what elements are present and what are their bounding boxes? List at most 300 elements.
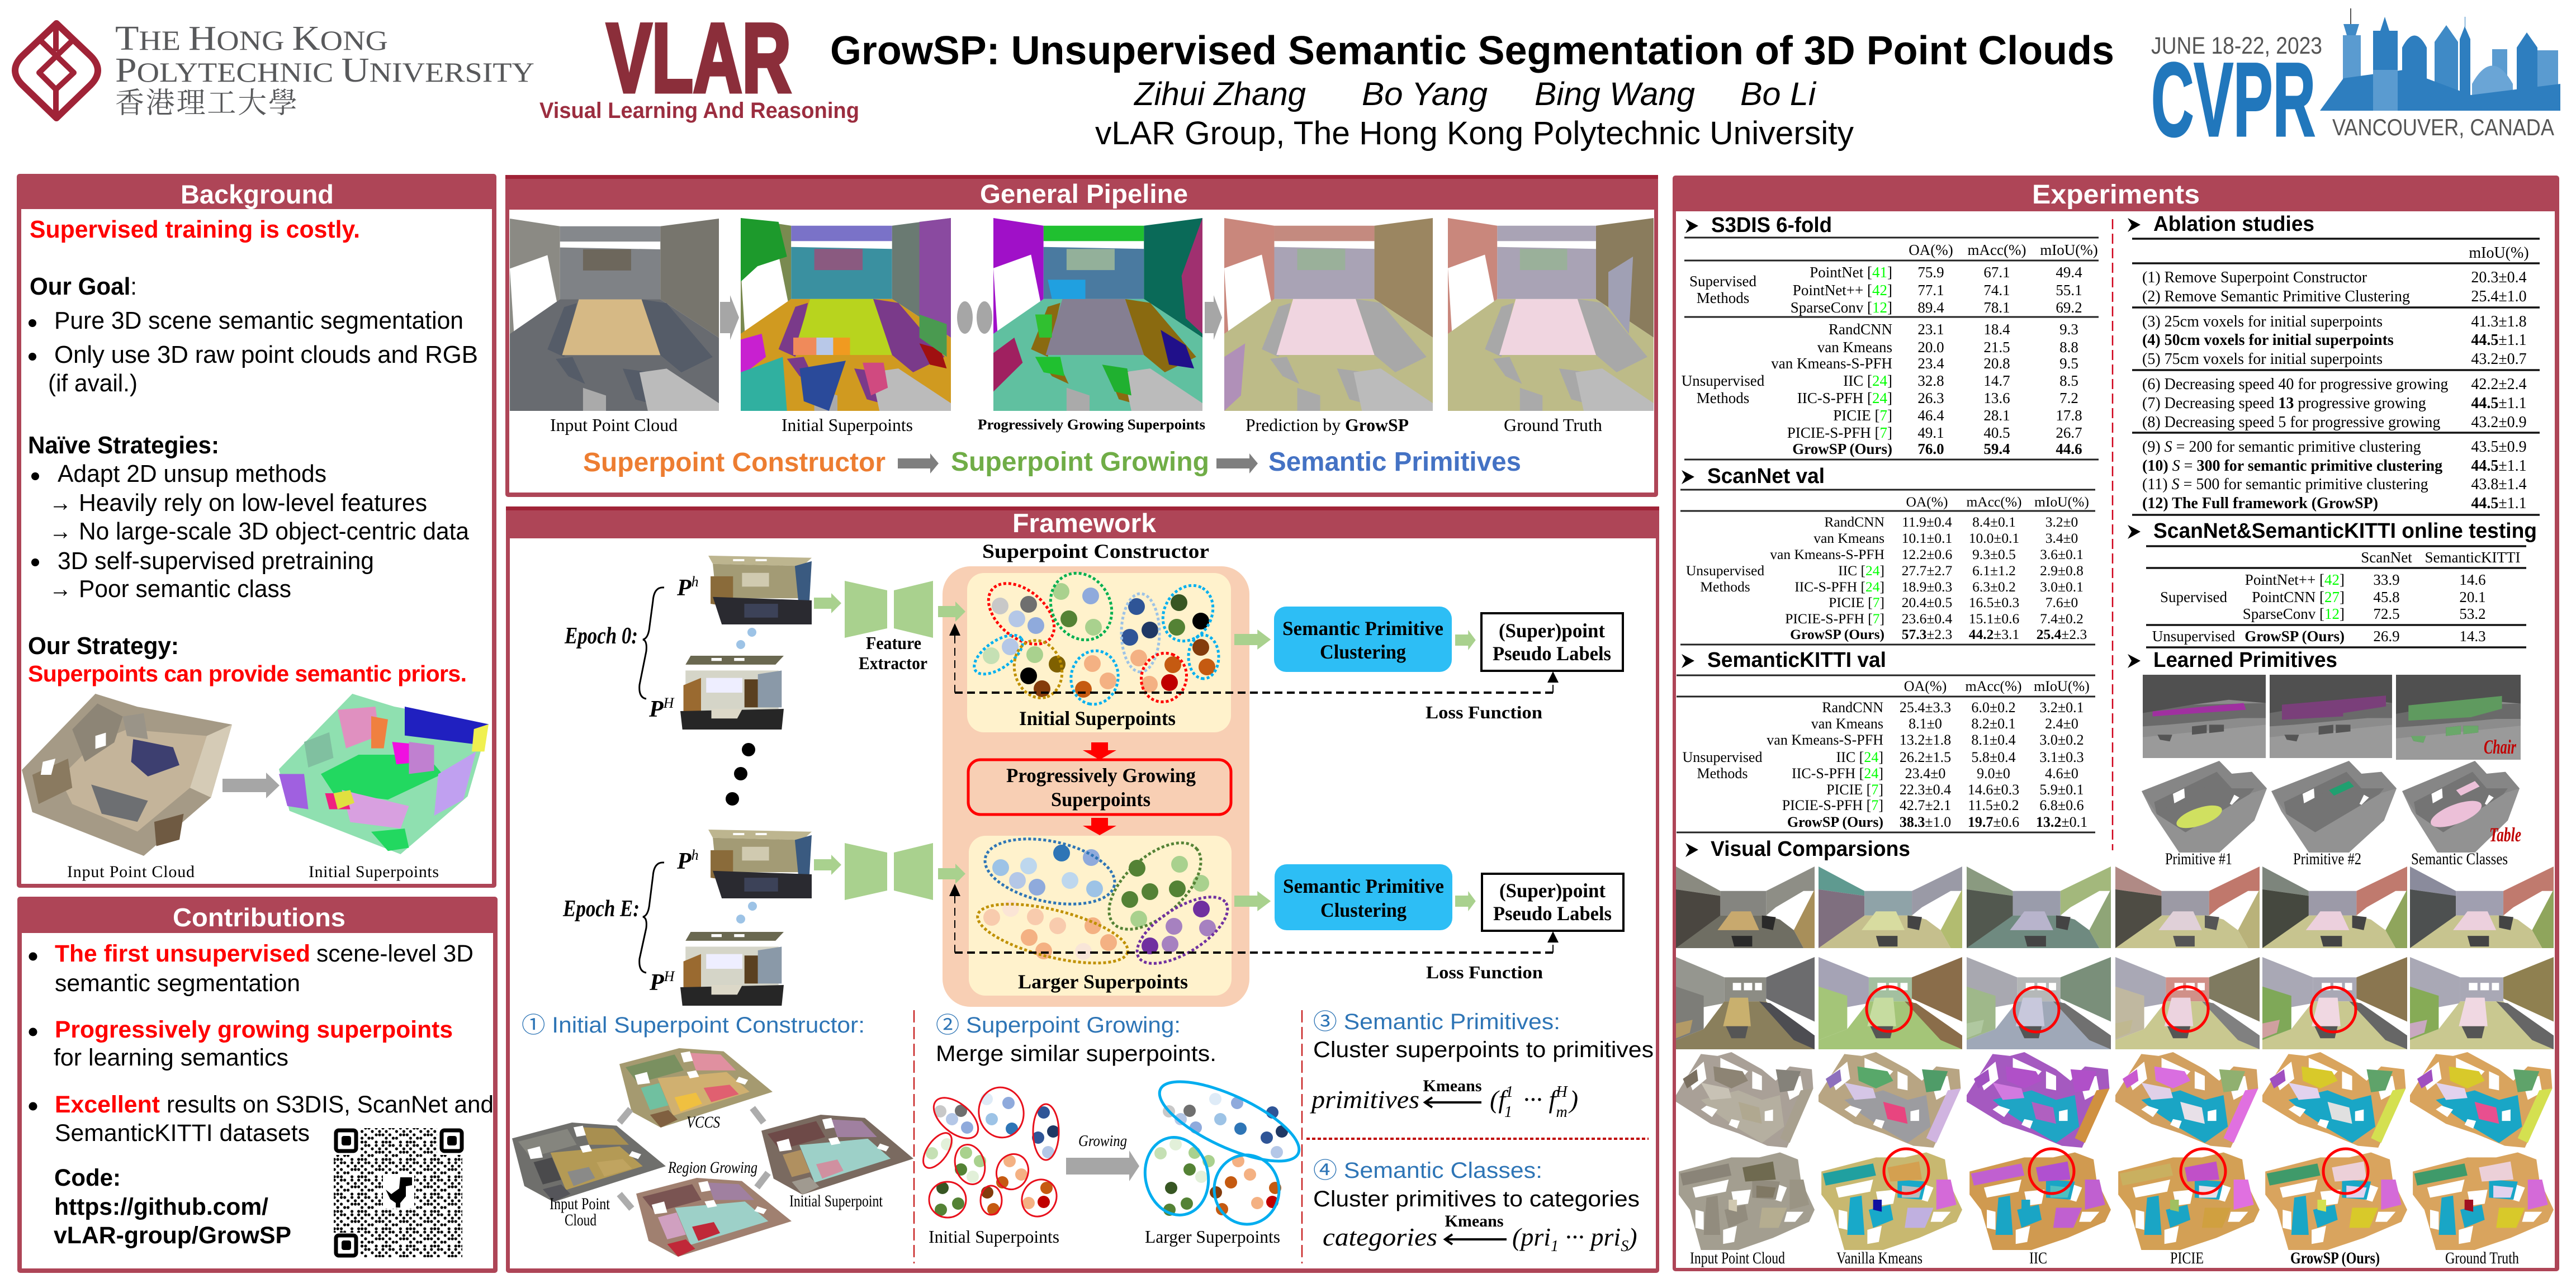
table: ScanNet results: 10.1±0.1 <box>1902 530 1952 546</box>
section: learned primitives <box>2128 648 2521 868</box>
heading: experiments: Experiments <box>2032 180 2200 210</box>
table: ScanNet results: 11.9±0.4 <box>1902 514 1952 530</box>
text: cluster primitives: Cluster primitives to categories <box>1313 1187 1640 1211</box>
heading: visual comparisons: Visual Comparsions <box>1711 837 1910 861</box>
block: pseudo labels 0: Pseudo Labels <box>1493 642 1611 665</box>
image: chair semantic class <box>2396 675 2521 760</box>
formula: categories: ) <box>1627 1223 1637 1251</box>
captions: visual comparisons: Vanilla Kmeans <box>1836 1249 1922 1267</box>
text block: background copy: Naïve Strategies: <box>28 432 219 459</box>
captions: visual comparisons: IIC <box>2029 1249 2047 1267</box>
text block: background copy: Superpoints can provide semantic priors. <box>28 661 467 686</box>
table: ablation results: 25.4±1.0 <box>2471 288 2527 305</box>
captions: growing figure: Initial Superpoints <box>929 1227 1059 1247</box>
text: merge similar: Merge similar superpoints. <box>936 1041 1216 1066</box>
header: vLAR logo <box>539 4 859 123</box>
table: SemanticKITTI results: 26.2±1.5 <box>1900 749 1951 765</box>
table: SemanticKITTI results: PICIE-S-PFH [7] <box>1782 797 1883 813</box>
table: ablation results: (8) Decreasing speed 5 for progressive growing <box>2142 414 2440 431</box>
image: chair primitive 2 <box>2270 675 2392 758</box>
feature extractor: epoch E <box>845 843 933 900</box>
formula: categories: 1 <box>1551 1238 1559 1255</box>
table: SemanticKITTI results: 3.1±0.3 <box>2039 749 2084 765</box>
table: S3DIS results: IIC-S-PFH [24] <box>1797 390 1892 406</box>
header: CVPR logo <box>2151 8 2560 158</box>
caption: input point cloud: Input Point Cloud <box>67 863 195 881</box>
captions: learned primitives <box>2165 850 2508 868</box>
text: cluster superpoints: Cluster superpoints to primitives <box>1313 1038 1654 1062</box>
labels: VCCS and region growing: Cloud <box>565 1211 596 1229</box>
table: ScanNet results: 18.9±0.3 <box>1902 579 1952 595</box>
table: ScanNet results: 6.3±0.2 <box>1972 579 2016 595</box>
table: S3DIS results: 55.1 <box>2056 282 2082 299</box>
table: ablation results: (5) 75cm voxels for initial superpoints <box>2142 351 2383 368</box>
label: initial superpoints: Initial Superpoints <box>1019 707 1176 730</box>
groupings: larger dotted ellipses <box>972 827 1238 977</box>
panel: contributions <box>17 897 498 1273</box>
section: ablation studies <box>2128 212 2540 515</box>
heading: contributions: Contributions <box>173 903 345 932</box>
table: ScanNet results: 23.6±0.4 <box>1902 610 1952 627</box>
table: online testing results: 20.1 <box>2459 589 2486 605</box>
table: ScanNet results: mIoU(%) <box>2034 494 2089 510</box>
block: semantic primitive clustering E <box>1275 864 1452 930</box>
formula: categories <box>1323 1212 1637 1255</box>
header: vLAR logo: VLAR <box>607 4 791 113</box>
university name english: THE HONG KONG <box>115 20 388 58</box>
table: SemanticKITTI results: 5.9±0.1 <box>2039 782 2084 798</box>
table: ScanNet results: 20.4±0.5 <box>1902 594 1952 610</box>
table: S3DIS results: 69.2 <box>2056 299 2082 316</box>
labels: epoch 0: P <box>677 575 692 601</box>
code link: vLAR-group/GrowSP <box>54 1222 291 1249</box>
table: SemanticKITTI results: 23.4±0 <box>1905 765 1945 782</box>
image: input house <box>512 1123 666 1202</box>
heading: ablation: Ablation studies <box>2153 212 2314 236</box>
table: SemanticKITTI results: 19.7±0.6 <box>1968 814 2019 830</box>
heading: step 1: ① Initial Superpoint Constructor: <box>522 1013 865 1038</box>
arrow: growing to primitives <box>1216 453 1258 473</box>
formula: primitives: Kmeans <box>1423 1077 1481 1095</box>
labels: epoch E <box>562 847 699 996</box>
table: S3DIS results: RandCNN <box>1829 321 1892 338</box>
heading: learned primitives: Learned Primitives <box>2153 648 2337 672</box>
table: S3DIS results: 23.4 <box>1917 355 1944 372</box>
table: ScanNet results: 3.2±0 <box>2045 514 2078 530</box>
authors <box>1133 76 1817 112</box>
table: ablation results: 43.2±0.7 <box>2471 351 2527 368</box>
text block: background copy: (if avail.) <box>48 370 138 397</box>
table: S3DIS results: 59.4 <box>1983 441 2010 457</box>
heading: background: Background <box>181 179 334 209</box>
labels: VCCS and region growing <box>550 1113 883 1229</box>
image: initial superpoints <box>279 694 489 854</box>
dots: initial superpoints small <box>926 1093 1059 1216</box>
table: online testing results: 14.6 <box>2459 571 2486 588</box>
image: region growing house <box>636 1178 792 1257</box>
table: S3DIS results: 40.5 <box>1983 424 2010 441</box>
heading: general pipeline: General Pipeline <box>980 179 1188 209</box>
text block: background copy: Only use 3D raw point clouds and RGB <box>54 341 478 368</box>
image: top house VCCS <box>619 1048 773 1128</box>
table: S3DIS results: 7.2 <box>2059 390 2078 406</box>
table: ScanNet results: 15.1±0.6 <box>1969 610 2019 627</box>
panel: background <box>17 174 496 888</box>
authors: Zihui Zhang <box>1133 76 1306 112</box>
label: table: Table <box>2489 823 2521 846</box>
table: S3DIS results: 18.4 <box>1983 321 2010 338</box>
loss loop E <box>949 884 1559 982</box>
table: SemanticKITTI results: 8.2±0.1 <box>1971 716 2016 732</box>
table: S3DIS results: mAcc(%) <box>1968 242 2026 258</box>
table: SemanticKITTI results: 3.0±0.2 <box>2039 732 2084 748</box>
table: SemanticKITTI results: 38.3±1.0 <box>1900 814 1951 830</box>
text block: background copy: → <box>49 489 72 517</box>
table: ablation results: 43.5±0.9 <box>2471 438 2527 456</box>
table: SemanticKITTI results: 13.2±1.8 <box>1900 732 1951 748</box>
table: ScanNet results: 27.7±2.7 <box>1902 562 1952 579</box>
formula: categories: Kmeans <box>1445 1212 1504 1230</box>
input rooms: epoch 0 <box>680 556 812 730</box>
table: ablation results: 44.5±1.1 <box>2471 495 2527 512</box>
heading: step 4: ④ Semantic Classes: <box>1313 1158 1542 1183</box>
formula: categories: categories <box>1323 1223 1437 1251</box>
table: online testing results: PointNet++ [42] <box>2245 571 2345 588</box>
table: S3DIS results: van Kmeans-S-PFH <box>1771 355 1892 372</box>
label: semantic primitives: Semantic Primitives <box>1268 447 1521 477</box>
authors: Bo Yang <box>1362 76 1488 112</box>
table: online testing results: 72.5 <box>2373 605 2400 622</box>
block: semantic primitive clustering 0: Semantic Primitive <box>1282 617 1443 640</box>
table: S3DIS results: 77.1 <box>1917 282 1944 299</box>
table: ablation results: (6) Decreasing speed 40 for progressive growing <box>2142 376 2448 393</box>
caption: initial superpoints: Initial Superpoints <box>309 863 439 881</box>
table: SemanticKITTI results: 8.1±0.4 <box>1971 732 2016 748</box>
captions: learned primitives: Semantic Classes <box>2411 850 2508 868</box>
table: SemanticKITTI results: OA(%) <box>1904 678 1947 694</box>
formula: primitives: 1 <box>1505 1083 1512 1101</box>
table: S3DIS results: 49.1 <box>1917 424 1944 441</box>
captions: visual comparisons: Ground Truth <box>2445 1249 2519 1267</box>
header: vLAR logo: Visual Learning And Reasoning <box>539 98 859 123</box>
table: S3DIS results: mIoU(%) <box>2040 242 2098 258</box>
contribution 1: semantic segmentation <box>55 970 300 997</box>
labels: epoch 0 <box>564 574 699 722</box>
table: SemanticKITTI results: 8.1±0 <box>1909 716 1942 732</box>
table: ablation results: (2) Remove Semantic Primitive Clustering <box>2142 288 2410 305</box>
labels: epoch 0: h <box>692 574 699 590</box>
groupings: larger cyan ellipses <box>1138 1066 1309 1227</box>
block: semantic primitive clustering E: Semantic Primitive <box>1283 875 1444 897</box>
table: S3DIS results: Unsupervised <box>1682 372 1765 389</box>
contribution 3: Excellent <box>55 1091 160 1118</box>
image: table primitive 2 <box>2271 761 2397 853</box>
heading: S3DIS: S3DIS 6-fold <box>1711 214 1832 237</box>
arrow: pipeline step 1 <box>720 295 739 340</box>
box: progressively growing superpoints <box>968 760 1231 815</box>
arrow: growing <box>1066 1150 1139 1181</box>
labels: VCCS and region growing: Input Point <box>550 1195 610 1213</box>
table: SemanticKITTI results: mIoU(%) <box>2034 678 2090 694</box>
authors: Bing Wang <box>1535 76 1695 112</box>
formula: primitives: ) <box>1568 1085 1578 1114</box>
formula: categories: (pri <box>1512 1223 1551 1251</box>
heading: superpoint constructor: Superpoint Constructor <box>982 540 1209 562</box>
dots: larger superpoints <box>983 845 1216 960</box>
label: larger superpoints: Larger Superpoints <box>1018 970 1188 993</box>
heading: step 3: ③ Semantic Primitives: <box>1313 1010 1560 1034</box>
table: S3DIS results: PointNet [41] <box>1810 264 1892 281</box>
image row 3: house scenes <box>1676 1052 2552 1148</box>
table: ScanNet results: 57.3±2.3 <box>1902 626 1952 642</box>
table: S3DIS results: 21.5 <box>1983 339 2010 356</box>
code link: Code: <box>54 1164 121 1191</box>
university name english <box>115 20 534 89</box>
formula: categories: ··· <box>1559 1223 1591 1251</box>
ellipsis: between epochs <box>726 743 755 806</box>
header: university logo <box>15 20 534 120</box>
table: SemanticKITTI results: GrowSP (Ours) <box>1787 814 1883 830</box>
contribution 1 <box>29 940 473 997</box>
table: ablation results: 42.2±2.4 <box>2471 376 2527 393</box>
table: online testing results: Unsupervised <box>2152 628 2236 645</box>
image row 1: library rooms <box>1676 866 2554 948</box>
section: S3DIS 6-fold <box>1682 214 2099 460</box>
image row 4: apartment scenes <box>1679 1152 2554 1250</box>
captions: learned primitives: Primitive #2 <box>2293 850 2361 868</box>
image: table semantic class <box>2402 761 2520 853</box>
table: ablation results: (9) S = 200 for semantic primitive clustering <box>2142 438 2421 456</box>
table: online testing results: 14.3 <box>2459 628 2486 645</box>
text block: background copy: Our Goal: <box>30 273 137 300</box>
contribution 3: SemanticKITTI datasets <box>55 1120 310 1147</box>
authors: Bo Li <box>1740 76 1817 112</box>
table: SemanticKITTI results: 13.2±0.1 <box>2036 814 2087 830</box>
formula: primitives: (f <box>1490 1085 1505 1114</box>
table: S3DIS results: PICIE [7] <box>1833 407 1892 424</box>
text block: background copy: Heavily rely on low-level features <box>79 489 427 517</box>
table: ScanNet results: van Kmeans-S-PFH <box>1770 546 1884 562</box>
table: ScanNet results: van Kmeans <box>1813 530 1884 546</box>
block: pseudo labels 0 <box>1481 613 1623 671</box>
table: S3DIS results: OA(%) <box>1909 242 1953 258</box>
table: ablation results: mIoU(%) <box>2469 244 2529 262</box>
captions: visual comparisons: GrowSP (Ours) <box>2290 1249 2380 1267</box>
block: semantic primitive clustering 0: Clustering <box>1320 641 1406 663</box>
text block: background copy: No large-scale 3D object-centric data <box>79 518 469 545</box>
table: S3DIS results: 67.1 <box>1983 264 2010 281</box>
image row 2: office rooms <box>1676 957 2554 1049</box>
table: S3DIS results: 20.0 <box>1917 339 1944 356</box>
image: input point cloud <box>510 219 719 411</box>
formula: primitives: m <box>1556 1104 1568 1121</box>
captions: Progressively Growing Superpoints <box>978 416 1205 433</box>
image: prediction by GrowSP <box>1224 218 1433 411</box>
table: S3DIS results: IIC [24] <box>1843 372 1892 389</box>
table: S3DIS results: 13.6 <box>1983 390 2010 406</box>
table: SemanticKITTI results: 6.0±0.2 <box>1971 699 2016 716</box>
table: ScanNet results: 12.2±0.6 <box>1902 546 1952 562</box>
labels: epoch E: h <box>692 847 699 863</box>
label: chair: Chair <box>2484 736 2517 758</box>
image: initial superpoint house <box>761 1115 913 1195</box>
table: S3DIS results: 76.0 <box>1917 441 1944 457</box>
column: initial superpoint constructor <box>512 1013 913 1257</box>
table: SemanticKITTI results: 14.6±0.3 <box>1968 782 2019 798</box>
labels: epoch 0: H <box>663 695 675 711</box>
table: S3DIS results: GrowSP (Ours) <box>1792 441 1892 457</box>
title: GrowSP: Unsupervised Semantic Segmentation of 3D Point Clouds <box>830 29 2114 73</box>
section: online testing <box>2128 519 2537 647</box>
table: ablation results: 44.5±1.1 <box>2471 457 2527 475</box>
table: online testing results: GrowSP (Ours) <box>2244 628 2345 645</box>
table: ablation results <box>2132 239 2540 515</box>
table: S3DIS results: van Kmeans <box>1817 339 1892 356</box>
table: S3DIS results: Supervised <box>1689 273 1756 290</box>
table: ScanNet results: GrowSP (Ours) <box>1790 626 1884 642</box>
formula: primitives: H <box>1555 1083 1568 1101</box>
captions <box>550 415 1602 435</box>
table: S3DIS results: 26.3 <box>1917 390 1944 406</box>
table: online testing results: 53.2 <box>2459 605 2486 622</box>
input rooms: epoch E <box>680 830 812 1006</box>
table: ablation results: (4) 50cm voxels for initial superpoints <box>2142 332 2394 349</box>
formula: categories: S <box>1621 1238 1628 1255</box>
icon: Vancouver skyline <box>2320 8 2560 111</box>
table: S3DIS results: 74.1 <box>1983 282 2010 299</box>
table: online testing results: 33.9 <box>2373 571 2400 588</box>
arrow: pipeline step 2 <box>1205 295 1222 340</box>
table: S3DIS results: 89.4 <box>1917 299 1944 316</box>
arrows: green flow epoch E <box>814 855 1476 911</box>
captions: Initial Superpoints <box>782 415 913 435</box>
table: S3DIS results: 9.5 <box>2059 355 2078 372</box>
feature extractor: epoch 0: Feature <box>866 633 921 653</box>
table: S3DIS results: 32.8 <box>1917 372 1944 389</box>
university name english: POLYTECHNIC UNIVERSITY <box>115 51 534 89</box>
formula: primitives: ··· <box>1517 1085 1549 1114</box>
table: SemanticKITTI results <box>1677 675 2095 832</box>
table: ablation results: 43.2±0.9 <box>2471 414 2527 431</box>
table: S3DIS results: PointNet++ [42] <box>1793 282 1892 299</box>
table: ablation results: (1) Remove Superpoint Constructor <box>2142 269 2367 286</box>
formula: primitives: 1 <box>1504 1104 1512 1121</box>
table: online testing results: 26.9 <box>2373 628 2400 645</box>
label: superpoint growing: Superpoint Growing <box>951 447 1209 477</box>
table: SemanticKITTI results: 5.8±0.4 <box>1971 749 2016 765</box>
formula: primitives: primitives <box>1310 1085 1419 1114</box>
table: S3DIS results: Methods <box>1697 390 1749 406</box>
column: semantic primitives and classes <box>1306 1010 1654 1255</box>
table: online testing results: SparseConv [12] <box>2243 605 2345 622</box>
table: online testing results: SemanticKITTI <box>2425 549 2520 566</box>
text block: background copy: → <box>49 575 72 603</box>
labels: epoch E: H <box>664 968 675 984</box>
table: ScanNet results: 8.4±0.1 <box>1972 514 2016 530</box>
table: S3DIS results: PICIE-S-PFH [7] <box>1787 424 1892 441</box>
table: ScanNet results: 7.6±0 <box>2045 594 2078 610</box>
table: SemanticKITTI results: IIC-S-PFH [24] <box>1792 765 1883 782</box>
label: superpoint constructor: Superpoint Constructor <box>583 448 886 477</box>
table: SemanticKITTI results: mAcc(%) <box>1965 678 2022 694</box>
formula: primitives: f <box>1549 1085 1556 1114</box>
box: initial superpoints <box>967 562 1231 732</box>
arrow: red down 1 <box>1083 742 1116 760</box>
text block: background copy: Pure 3D scene semantic segmentation <box>54 307 463 334</box>
table: ScanNet results: PICIE-S-PFH [7] <box>1785 610 1884 627</box>
date: JUNE 18-22, 2023 <box>2151 32 2322 59</box>
image: chair primitive 1 <box>2143 675 2266 758</box>
table: SemanticKITTI results: 22.3±0.4 <box>1900 782 1951 798</box>
loss loop E: Loss Function <box>1426 962 1543 982</box>
captions: Input Point Cloud <box>550 415 678 435</box>
text block: background copy: → <box>49 518 72 545</box>
table: ablation results: 41.3±1.8 <box>2471 313 2527 330</box>
caption: larger superpoints: Larger Superpoints <box>1145 1227 1280 1247</box>
table: online testing results: PointCNN [27] <box>2252 589 2345 605</box>
loss loop 0: Loss Function <box>1426 702 1542 722</box>
table: S3DIS results: Methods <box>1697 290 1749 306</box>
contribution 3: results on S3DIS, ScanNet and <box>167 1091 494 1118</box>
contribution 1: The first unsupervised <box>55 940 310 967</box>
text block: background copy: Our Strategy: <box>28 632 179 660</box>
table: ScanNet results: 2.9±0.8 <box>2040 562 2083 579</box>
table: ScanNet results: IIC-S-PFH [24] <box>1794 579 1884 595</box>
table: ScanNet results: 9.3±0.5 <box>1972 546 2016 562</box>
table: SemanticKITTI results: 2.4±0 <box>2045 716 2078 732</box>
captions: visual comparisons: Input Point Cloud <box>1690 1249 1785 1267</box>
table: online testing results: 45.8 <box>2373 589 2400 605</box>
table: S3DIS results: 49.4 <box>2056 264 2082 281</box>
table: SemanticKITTI results: 9.0±0 <box>1977 765 2010 782</box>
labels: epoch E: P <box>677 849 692 874</box>
table: SemanticKITTI results: 25.4±3.3 <box>1900 699 1951 716</box>
table: SemanticKITTI results: van Kmeans <box>1811 716 1883 732</box>
table: SemanticKITTI results: RandCNN <box>1822 699 1883 716</box>
arrow: input to superpoints <box>222 773 280 798</box>
university name chinese: 香港理工大學 <box>115 88 297 120</box>
heading: SemanticKITTI: SemanticKITTI val <box>1707 648 1886 672</box>
captions: learned primitives: Primitive #1 <box>2165 850 2232 868</box>
table: S3DIS results: 20.8 <box>1983 355 2010 372</box>
icon: PolyU knot <box>15 23 98 118</box>
feature extractor: epoch 0: Extractor <box>859 653 927 673</box>
feature extractor: epoch 0 <box>845 581 933 673</box>
table: SemanticKITTI results: van Kmeans-S-PFH <box>1767 732 1883 748</box>
groupings: initial dotted ellipses <box>968 562 1223 708</box>
CVPR wordmark: CVPR <box>2151 41 2315 158</box>
table: ScanNet results: 10.0±0.1 <box>1969 530 2019 546</box>
table: SemanticKITTI results: 3.2±0.1 <box>2039 699 2084 716</box>
table: ScanNet results: RandCNN <box>1824 514 1884 530</box>
block: semantic primitive clustering 0 <box>1274 607 1452 672</box>
labels: VCCS and region growing: Initial Superpoint <box>789 1192 883 1210</box>
labels: epoch E: P <box>650 970 664 996</box>
text block: background copy <box>28 216 478 686</box>
table: online testing results <box>2146 546 2526 647</box>
labels: epoch E: Epoch E: <box>562 896 640 922</box>
table: ScanNet results: 3.6±0.1 <box>2040 546 2083 562</box>
table: ScanNet results: IIC [24] <box>1838 562 1884 579</box>
box: progressively growing superpoints: Superpoints <box>1051 788 1150 811</box>
container: constructor background <box>943 566 1249 1007</box>
table: S3DIS results: 9.3 <box>2059 321 2078 338</box>
table: S3DIS results: 46.4 <box>1917 407 1944 424</box>
labels: VCCS and region growing: VCCS <box>686 1113 720 1131</box>
table: ScanNet results: 44.2±3.1 <box>1969 626 2019 642</box>
image: progressively growing superpoints <box>993 218 1202 411</box>
table: S3DIS results: 44.6 <box>2056 441 2082 457</box>
